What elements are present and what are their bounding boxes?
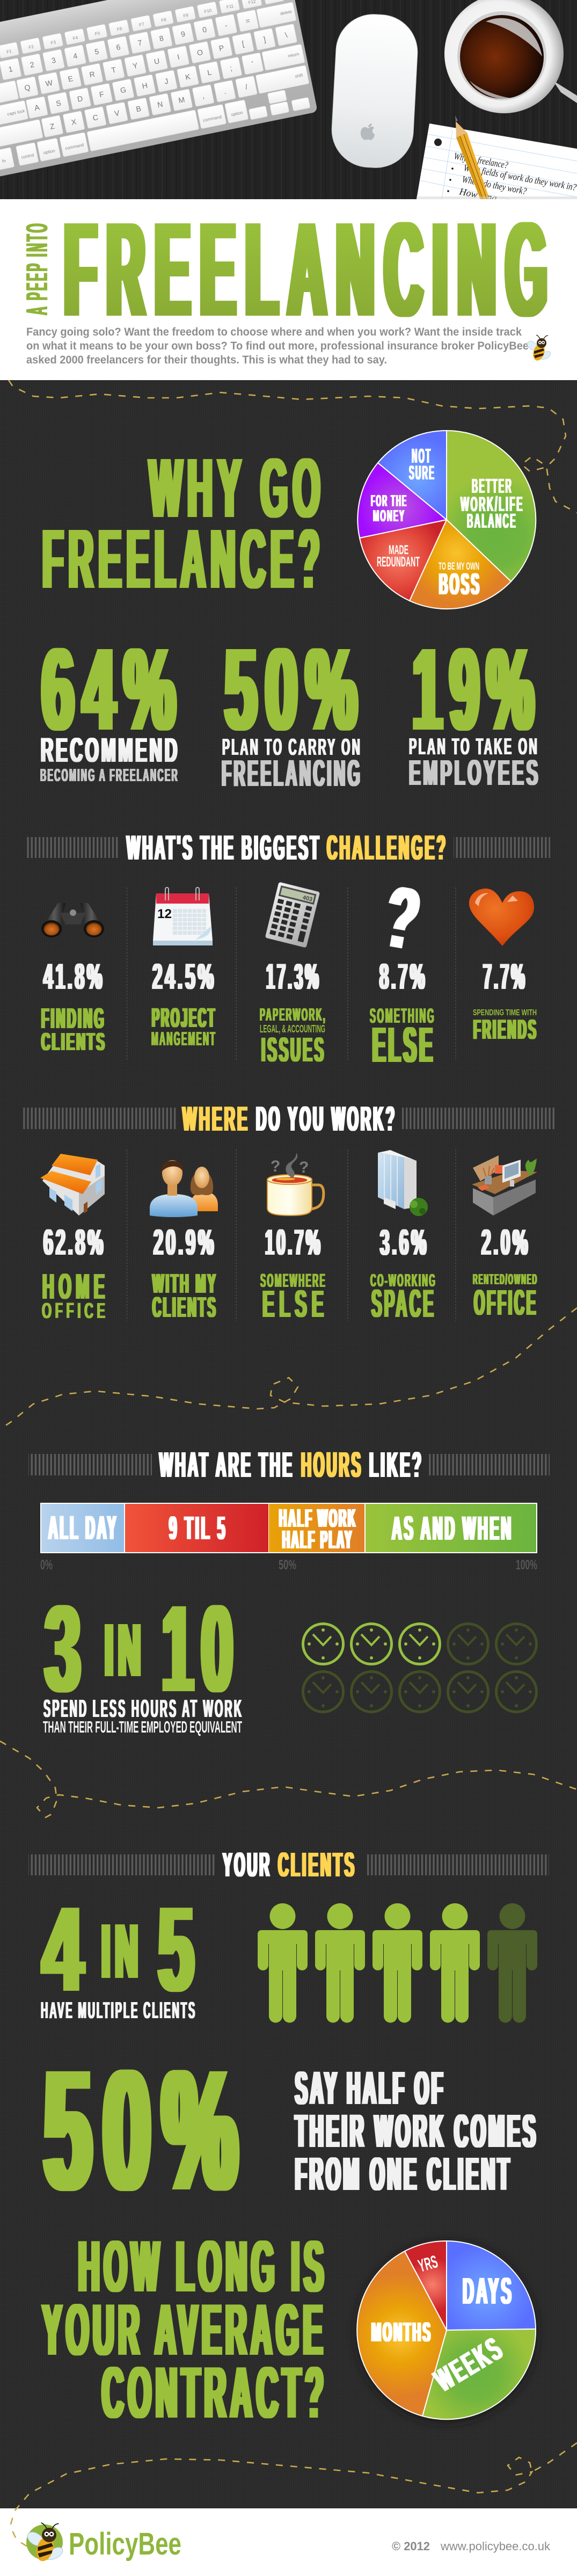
pie chart: contract length (355, 2241, 538, 2424)
icon: keyboard: 8 (158, 34, 164, 43)
icon: keyboard: , (201, 91, 205, 100)
heading: why go freelance (42, 441, 325, 606)
icon: keyboard: C (92, 113, 99, 122)
icon: keyboard: F4 (72, 35, 78, 41)
stat: 4 in 5: 5 (158, 1881, 194, 2017)
icon: notepad with pencil (417, 115, 577, 205)
icon: keyboard: K (185, 72, 192, 82)
icon: keyboard: F (99, 90, 105, 99)
icon: calendar (153, 887, 213, 945)
text: 64% (42, 624, 184, 755)
stat: 3 in 10 (43, 1580, 243, 1736)
icon: keyboard: 0 (202, 25, 208, 34)
icon: keyboard: 5 (94, 47, 100, 56)
icon: notepad with pencil: Why go freelance? (453, 150, 509, 171)
segment: as and when (366, 1504, 536, 1552)
labels: where do you work: SOMEWHERE (260, 1270, 326, 1291)
icon: keyboard (0, 0, 318, 200)
icon: notepad with pencil: How long... (458, 186, 505, 205)
stacked bar: working hours: ALL DAY (48, 1509, 118, 1547)
icon: keyboard: F1 (6, 48, 12, 54)
white footer panel (0, 2508, 577, 2576)
text: SPEND LESS HOURS AT WORK (43, 1694, 243, 1722)
stat: 64% recommend (40, 624, 184, 785)
icon: keyboard: 6 (115, 42, 121, 52)
percent row: biggest challenge: 8.7% (379, 956, 427, 997)
icon: keyboard: T (111, 66, 117, 75)
pie chart: contract length: YRS (416, 2251, 440, 2276)
icon: coffee cup (444, 0, 577, 113)
segment: all day (41, 1504, 124, 1552)
intro paragraph (26, 326, 529, 366)
icon: keyboard: caps lock (7, 108, 26, 117)
labels: biggest challenge: SOMETHING (370, 1005, 435, 1028)
labels: biggest challenge: FINDING (41, 1002, 106, 1035)
intro paragraph: on what it means to be your own boss? To find out more, professional insurance broker PolicyBee (26, 340, 529, 352)
labels: biggest challenge: ISSUES (261, 1030, 326, 1069)
icon: keyboard: command (202, 114, 222, 123)
icon: keyboard: [ (241, 39, 245, 48)
text: 50% (225, 624, 366, 755)
icon: keyboard: option (231, 110, 243, 117)
pie labels: MONEY (373, 506, 405, 525)
heading: what are the hours like: LIKE? (369, 1445, 423, 1485)
text: FREELANCING (222, 752, 362, 794)
icon: keyboard: delete (280, 9, 293, 16)
labels: biggest challenge (41, 1002, 538, 1073)
bar axis labels (40, 1558, 537, 1573)
labels: where do you work: WITH MY (152, 1268, 217, 1299)
icon: keyboard: return (288, 52, 300, 59)
hero: desk photo illustration (0, 0, 577, 205)
icon: desk (472, 1155, 537, 1216)
icon: keyboard: - (224, 20, 228, 30)
column dividers (127, 887, 456, 1321)
slice: for the money (357, 463, 447, 538)
labels: biggest challenge: ELSE (373, 1017, 435, 1073)
labels: where do you work: H O M E (42, 1267, 105, 1307)
icon: heart (469, 889, 534, 946)
icon: keyboard: \ (284, 31, 288, 39)
icon: keyboard: E (67, 74, 74, 83)
icon: keyboard: ; (229, 63, 233, 72)
icon: keyboard: B (135, 104, 142, 113)
stat: 50% half of work: 50% (45, 2034, 250, 2226)
icon: keyboard: J (164, 77, 169, 86)
icon: keyboard: L (207, 68, 213, 77)
pie chart: contract length: WEEKS (428, 2330, 510, 2398)
dashed flight path 1 (9, 380, 577, 513)
percent row: where do you work: 3.6% (380, 1222, 429, 1263)
icon: mug with steam (267, 1153, 324, 1216)
icon: keyboard: M (178, 95, 186, 105)
heading: what are the hours like: HOURS (301, 1445, 363, 1485)
icon: keyboard: A (34, 103, 41, 112)
pie labels: FOR THE (371, 491, 407, 510)
percent row: biggest challenge: 24.5% (152, 956, 216, 997)
percent row: where do you work: 10.7% (265, 1222, 323, 1263)
icon: keyboard: W (45, 78, 54, 88)
dashed flight path 3 (0, 1741, 577, 1817)
intro paragraph: Fancy going solo? Want the freedom to choose where and when you work? Want the inside track (26, 326, 522, 338)
pie labels: BOSS (439, 567, 481, 601)
stat: 50% plan to carry on (222, 624, 366, 794)
footer credits: © 2012 (392, 2539, 430, 2553)
icon: keyboard: H (141, 81, 148, 90)
segment: half work half play (269, 1504, 364, 1552)
percent row: biggest challenge (43, 956, 527, 997)
text: THAN THEIR FULL-TIME EMPLOYED EQUIVALENT (43, 1718, 242, 1736)
icon: small bee (525, 335, 552, 362)
icon: keyboard: fn (2, 158, 6, 164)
labels: where do you work: O F F I C E (42, 1298, 105, 1323)
bar axis labels: 50% (279, 1558, 296, 1573)
icon: keyboard: P (218, 43, 225, 53)
slice: days (447, 2241, 536, 2330)
icon: keyboard: ] (262, 35, 266, 43)
icon: keyboard: Q (24, 83, 31, 92)
dashed flight path 2 (0, 1308, 577, 1429)
icon: keyboard: F8 (161, 17, 167, 23)
heading: where do you work: WHERE (182, 1099, 250, 1138)
labels: where do you work (42, 1267, 538, 1326)
icon: keyboard: F5 (94, 31, 101, 37)
icon: office building (378, 1150, 428, 1216)
icon: keyboard: D (77, 94, 84, 104)
clock pictogram: 3 of 10 (303, 1624, 537, 1712)
icon: mug with steam: ? (299, 1159, 309, 1176)
labels: biggest challenge: PAPERWORK, (260, 1005, 326, 1024)
heading: your clients: YOUR (223, 1845, 272, 1884)
percent row: where do you work: 20.9% (154, 1222, 216, 1263)
stacked bar: working hours: HALF WORK (279, 1504, 357, 1533)
labels: biggest challenge: CLIENTS (41, 1028, 106, 1056)
heading: how long is your average contract (42, 2225, 328, 2433)
slice: to be my own boss (410, 520, 511, 609)
icon: keyboard: 3 (50, 56, 56, 65)
icon: keyboard: R (89, 70, 96, 79)
slice: weeks (422, 2329, 536, 2419)
icon: keyboard: U (154, 56, 160, 66)
pie labels: REDUNDANT (377, 554, 420, 570)
bar axis labels: 100% (516, 1558, 537, 1573)
icon: keyboard: F2 (28, 44, 34, 50)
icon: keyboard: 1 (8, 64, 13, 74)
icon: keyboard: ' (251, 59, 254, 68)
labels: where do you work: CLIENTS (152, 1291, 217, 1323)
slice: made redundant (360, 520, 447, 601)
logo: PolicyBee (25, 2523, 181, 2563)
icon: calendar: 12 (157, 907, 172, 921)
icon: keyboard: 4 (72, 51, 78, 61)
person pictogram: 4 of 5 (258, 1903, 537, 2022)
icon: keyboard: = (245, 16, 251, 25)
bar axis labels: 0% (40, 1558, 53, 1573)
icon: keyboard: N (157, 99, 164, 109)
stat: 4 in 5: 4 (42, 1881, 83, 2017)
slice: not sure (378, 431, 447, 520)
stat: 4 in 5 (41, 1881, 196, 2024)
icon: keyboard: 7 (137, 38, 143, 47)
icon: keyboard: option (43, 148, 55, 155)
icon: keyboard: O (196, 48, 203, 57)
text: 10 (162, 1580, 241, 1718)
pie labels: NOT (412, 445, 432, 468)
icon: keyboard: 2 (29, 60, 35, 69)
stacked bar: working hours: 9 TIL 5 (169, 1510, 227, 1546)
icon: house (40, 1154, 105, 1216)
slice: yrs (405, 2241, 447, 2330)
segment: 9 til 5 (125, 1504, 268, 1552)
icon: keyboard: F11 (226, 3, 234, 10)
heading: your clients (28, 1845, 549, 1884)
text: PLAN TO CARRY ON (222, 734, 362, 760)
labels: biggest challenge: LEGAL, & ACCOUNTING (260, 1023, 325, 1035)
icon: keyboard: Z (49, 121, 56, 131)
icon: binoculars (41, 903, 104, 937)
labels: where do you work: E L S E (262, 1283, 324, 1326)
text: A PEEP INTO (20, 222, 54, 315)
pie labels: MADE (389, 543, 408, 557)
heading: what are the hours like: WHAT ARE THE (159, 1445, 294, 1485)
stacked bar: working hours (40, 1503, 537, 1554)
icon: calculator: 403 (302, 894, 313, 903)
labels: biggest challenge: SPENDING TIME WITH (473, 1008, 537, 1017)
stat: 19% plan to take on (409, 624, 542, 793)
logo: PolicyBee: PolicyBee (69, 2527, 181, 2562)
icon: keyboard: F9 (183, 13, 189, 18)
stat: 64% recommend: RECOMMEND (41, 731, 180, 769)
text: HAVE MULTIPLE CLIENTS (41, 1997, 196, 2024)
icon: bee in green circle (25, 2523, 65, 2563)
icon: two people (150, 1160, 218, 1217)
icon: keyboard: F7 (138, 21, 145, 27)
icon: notepad with pencil: Where do they work? (461, 173, 528, 197)
pie chart: contract length: MONTHS (371, 2317, 432, 2347)
slice: better work/life balance (447, 431, 536, 581)
icon: mouse (330, 12, 419, 170)
labels: biggest challenge: PROJECT (152, 1002, 216, 1033)
dashed flight path 4 (10, 2443, 577, 2546)
icon: question mark: ? (378, 868, 426, 969)
labels: biggest challenge: MANGEMENT (151, 1028, 216, 1050)
icon: keyboard: S (55, 98, 62, 108)
white title panel (0, 194, 577, 380)
icon: keyboard: Y (132, 61, 139, 70)
pie chart: reasons for going freelance (357, 431, 536, 609)
icon: keyboard: F3 (50, 40, 56, 46)
icon: mug with steam: ? (271, 1158, 280, 1175)
pie labels: BETTER (472, 475, 513, 498)
icon: keyboard: shift (295, 72, 304, 79)
heading: what are the hours like (28, 1445, 550, 1485)
heading: where do you work (23, 1099, 554, 1138)
text: WHY GO (149, 441, 325, 535)
icon: keyboard: command (65, 142, 84, 151)
icon: keyboard: control (21, 152, 34, 160)
stat: 3 in 10: IN (105, 1607, 145, 1692)
footer credits (392, 2539, 551, 2553)
text: BECOMING A FREELANCER (40, 765, 179, 785)
stacked bar: working hours: HALF PLAY (282, 1526, 353, 1554)
percent row: where do you work: 62.8% (43, 1222, 106, 1263)
labels: where do you work: CO-WORKING (370, 1270, 436, 1290)
icon: keyboard: 9 (180, 30, 186, 39)
stat: 3 in 10: 3 (45, 1580, 81, 1718)
pie labels: SURE (409, 462, 435, 484)
pie labels: TO BE MY OWN (439, 561, 479, 572)
icon: keyboard: X (70, 117, 77, 127)
icon: keyboard: . (223, 87, 227, 96)
percent row: where do you work (43, 1222, 530, 1263)
stat: 4 in 5: IN (101, 1908, 143, 1995)
icon: keyboard: I (177, 53, 180, 61)
icon: keyboard: G (120, 85, 127, 94)
icon: calculator (265, 882, 320, 948)
footer credits: www.policybee.co.uk (440, 2539, 551, 2553)
labels: where do you work: SPACE (371, 1282, 436, 1326)
heading: your clients: CLIENTS (278, 1845, 356, 1884)
percent row: biggest challenge: 17.3% (266, 956, 321, 997)
icon: keyboard: V (114, 108, 121, 118)
slice: months (357, 2251, 447, 2416)
icon: keyboard: F6 (116, 26, 123, 32)
pie labels (371, 445, 524, 601)
icon: keyboard: / (244, 82, 249, 91)
percent row: biggest challenge: 41.8% (43, 956, 105, 997)
intro paragraph: asked 2000 freelancers for their thoughts. This is what they had to say. (26, 354, 387, 366)
icon: keyboard: F10 (204, 8, 213, 14)
